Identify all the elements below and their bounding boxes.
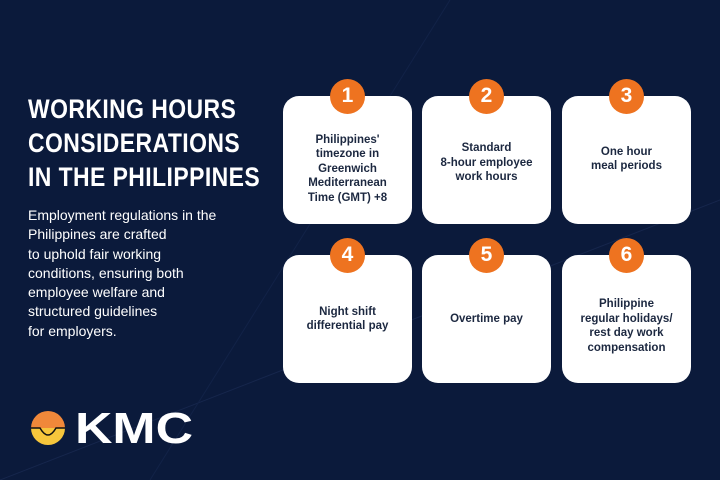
card 6: rest day work — [589, 327, 664, 339]
text: 5 — [481, 243, 492, 266]
intro text: Employment regulations in the — [28, 207, 216, 223]
intro text: to uphold fair working — [28, 246, 161, 262]
card 1 — [283, 96, 412, 224]
text: 4 — [342, 243, 353, 266]
intro text: conditions, ensuring both — [28, 265, 184, 281]
intro text: Philippines are crafted — [28, 226, 167, 242]
card 5: Overtime pay — [450, 313, 523, 325]
text: 6 — [621, 243, 632, 266]
card 2 — [422, 96, 551, 224]
card 2: 8-hour employee — [440, 157, 533, 169]
card 1: timezone in — [316, 148, 379, 160]
intro text: employee welfare and — [28, 284, 165, 300]
text: 1 — [342, 84, 353, 107]
card 4: differential pay — [307, 320, 388, 332]
logo — [31, 408, 193, 450]
card 5 — [422, 255, 551, 383]
card 1: Time (GMT) +8 — [308, 192, 387, 204]
card 6 — [562, 255, 691, 383]
card 1: Greenwich — [318, 163, 377, 175]
card 6: compensation — [588, 342, 665, 354]
title: CONSIDERATIONS — [28, 128, 240, 158]
text: 2 — [481, 84, 492, 107]
card 3: meal periods — [591, 160, 662, 172]
intro text — [28, 207, 216, 339]
card 2: work hours — [456, 171, 517, 183]
text: 3 — [621, 84, 632, 107]
card 4: Night shift — [319, 306, 376, 318]
intro text: structured guidelines — [28, 303, 157, 319]
card 1: Philippines' — [315, 134, 380, 146]
title: IN THE PHILIPPINES — [28, 162, 260, 192]
card 2: Standard — [462, 142, 511, 154]
card 6: Philippine — [599, 298, 654, 310]
card 4 — [283, 255, 412, 383]
intro text: for employers. — [28, 323, 117, 339]
title: WORKING HOURS — [28, 94, 236, 124]
title — [28, 94, 260, 192]
card 6: regular holidays/ — [580, 312, 673, 324]
card 3 — [562, 96, 691, 224]
card 3: One hour — [601, 146, 652, 158]
card 1: Mediterranean — [308, 177, 387, 189]
